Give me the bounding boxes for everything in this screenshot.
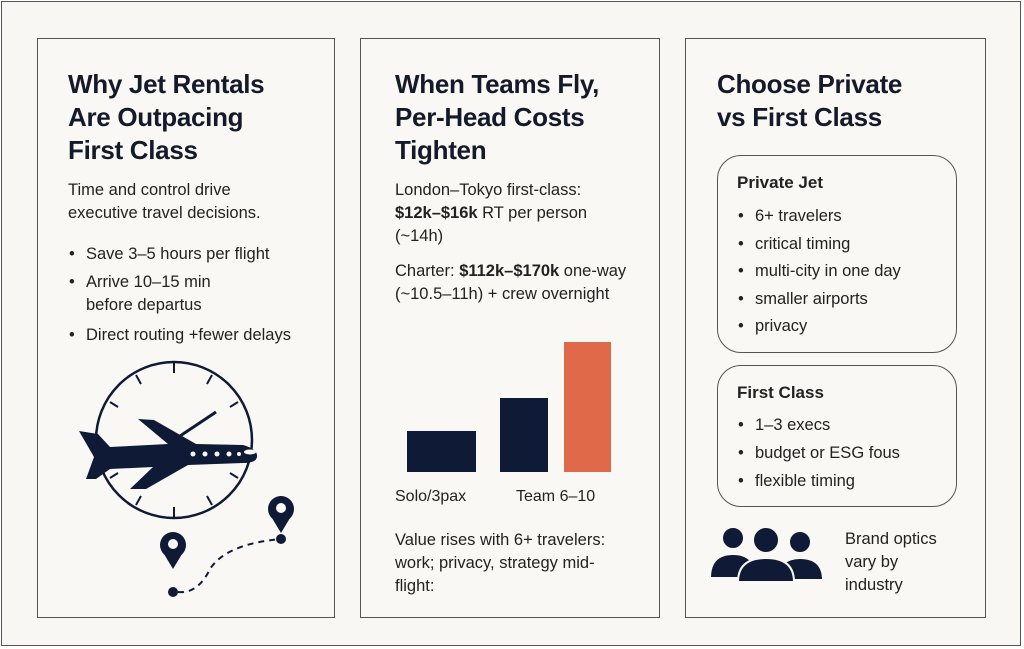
takeaway text [395,531,605,595]
panel: why jet rentals [37,38,335,618]
text: brand optics: Brand optics [845,530,937,548]
heading [68,69,264,165]
text: brand optics [845,530,937,594]
heading: Are Outpacing [68,102,243,132]
charter cost text [395,262,626,303]
box: private jet: privacy [755,317,807,335]
bullets: before departus [86,296,202,314]
charter cost text: (~10.5–11h) + crew overnight [395,285,609,303]
heading: Why Jet Rentals [68,69,264,99]
intro text [68,181,261,222]
text: brand optics: vary by [845,553,898,571]
box: first class: flexible timing [755,472,855,490]
charter cost text: Charter: $112k–$170k one-way [395,262,626,280]
box: private jet: critical timing [755,234,850,252]
box: first class [717,365,957,507]
heading: vs First Class [717,102,882,132]
box: private jet [717,155,957,353]
first-class cost text: (~14h) [395,227,443,245]
box: first class: First Class [737,383,824,402]
heading [717,69,902,132]
heading: When Teams Fly, [395,69,599,99]
icon: people [711,528,822,581]
box: private jet: Private Jet [737,173,823,192]
heading: First Class [68,135,198,165]
takeaway text: work; privacy, strategy mid- [395,554,595,572]
intro text: Time and control drive [68,181,231,199]
heading: Choose Private [717,69,902,99]
panel: team costs [360,38,660,618]
bar chart: Solo/3pax [395,488,466,505]
first-class cost text: London–Tokyo first-class: [395,181,581,199]
bullets: Direct routing +fewer delays [86,326,291,344]
heading: Tighten [395,135,486,165]
box: private jet: multi-city in one day [755,262,901,280]
bar chart: Team 6–10 [516,488,595,505]
takeaway text: flight: [395,577,434,595]
icon: clock with plane and route [79,360,294,597]
text: brand optics: industry [845,576,903,594]
heading [395,69,599,165]
box: first class: budget or ESG fous [755,444,900,462]
takeaway text: Value rises with 6+ travelers: [395,531,605,549]
intro text: executive travel decisions. [68,204,261,222]
first-class cost text [395,181,587,245]
first-class cost text: $12k–$16k RT per person [395,204,587,222]
panel: choose [685,38,986,618]
bullets [70,245,291,344]
heading: Per-Head Costs [395,102,584,132]
bullets: Arrive 10–15 min [86,273,211,291]
box: first class: 1–3 execs [755,416,830,434]
bullets: Save 3–5 hours per flight [86,245,269,263]
bar chart [395,342,611,505]
box: private jet: 6+ travelers [755,207,842,225]
box: private jet: smaller airports [755,290,868,308]
